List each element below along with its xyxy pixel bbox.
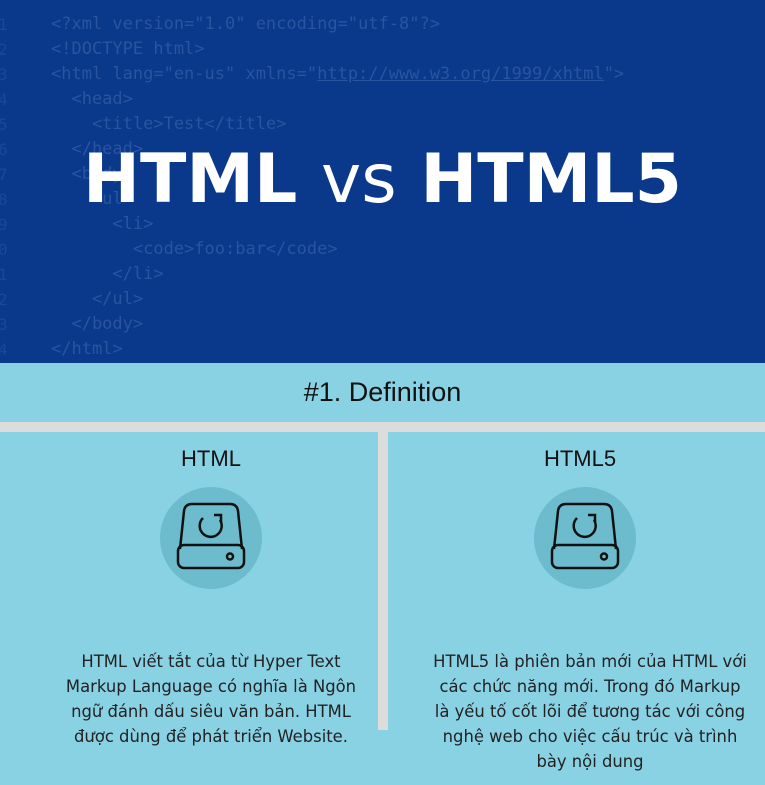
text: HTML definition: ngữ đánh dấu siêu văn bản. HTML bbox=[71, 702, 351, 721]
text: HTML5 definition: là yếu tố cốt lõi để tương tác với công bbox=[435, 702, 745, 721]
text: HTML5 definition: HTML5 là phiên bản mới của HTML với bbox=[433, 652, 747, 671]
heading: HTML5: HTML5 bbox=[544, 446, 616, 471]
text: HTML definition: HTML viết tắt của từ Hyper Text bbox=[81, 652, 341, 671]
section heading: #1. Definition bbox=[304, 377, 461, 407]
text: HTML5 definition bbox=[433, 652, 747, 771]
text: HTML5 definition: nghệ web cho việc cấu trúc và trình bbox=[443, 727, 737, 746]
title: HTML vs HTML5 bbox=[83, 140, 682, 219]
text: HTML5 definition: các chức năng mới. Trong đó Markup bbox=[439, 677, 741, 696]
text: HTML definition: Markup Language có nghĩa là Ngôn bbox=[66, 677, 356, 696]
header banner bbox=[0, 0, 765, 363]
text: HTML5 definition: bày nội dung bbox=[536, 752, 644, 771]
text: HTML definition: được dùng để phát triển Website. bbox=[74, 727, 348, 746]
background code snippet: <?xml version="1.0" encoding="utf-8"?> <!DOCTYPE html> <html lang="en-us" xmlns="http://www.w3.org/1999/xhtml"> <head> <title>Test</title> </head> <body> <ul> <li> <code>foo:bar</code> </li> </ul> </body> </html> bbox=[51, 14, 624, 359]
icon: drive bbox=[160, 487, 262, 589]
heading: HTML: HTML bbox=[181, 446, 241, 471]
panel: HTML bbox=[66, 446, 356, 746]
panel: HTML5 bbox=[433, 446, 747, 771]
icon: drive bbox=[534, 487, 636, 589]
text: HTML definition bbox=[66, 652, 356, 746]
